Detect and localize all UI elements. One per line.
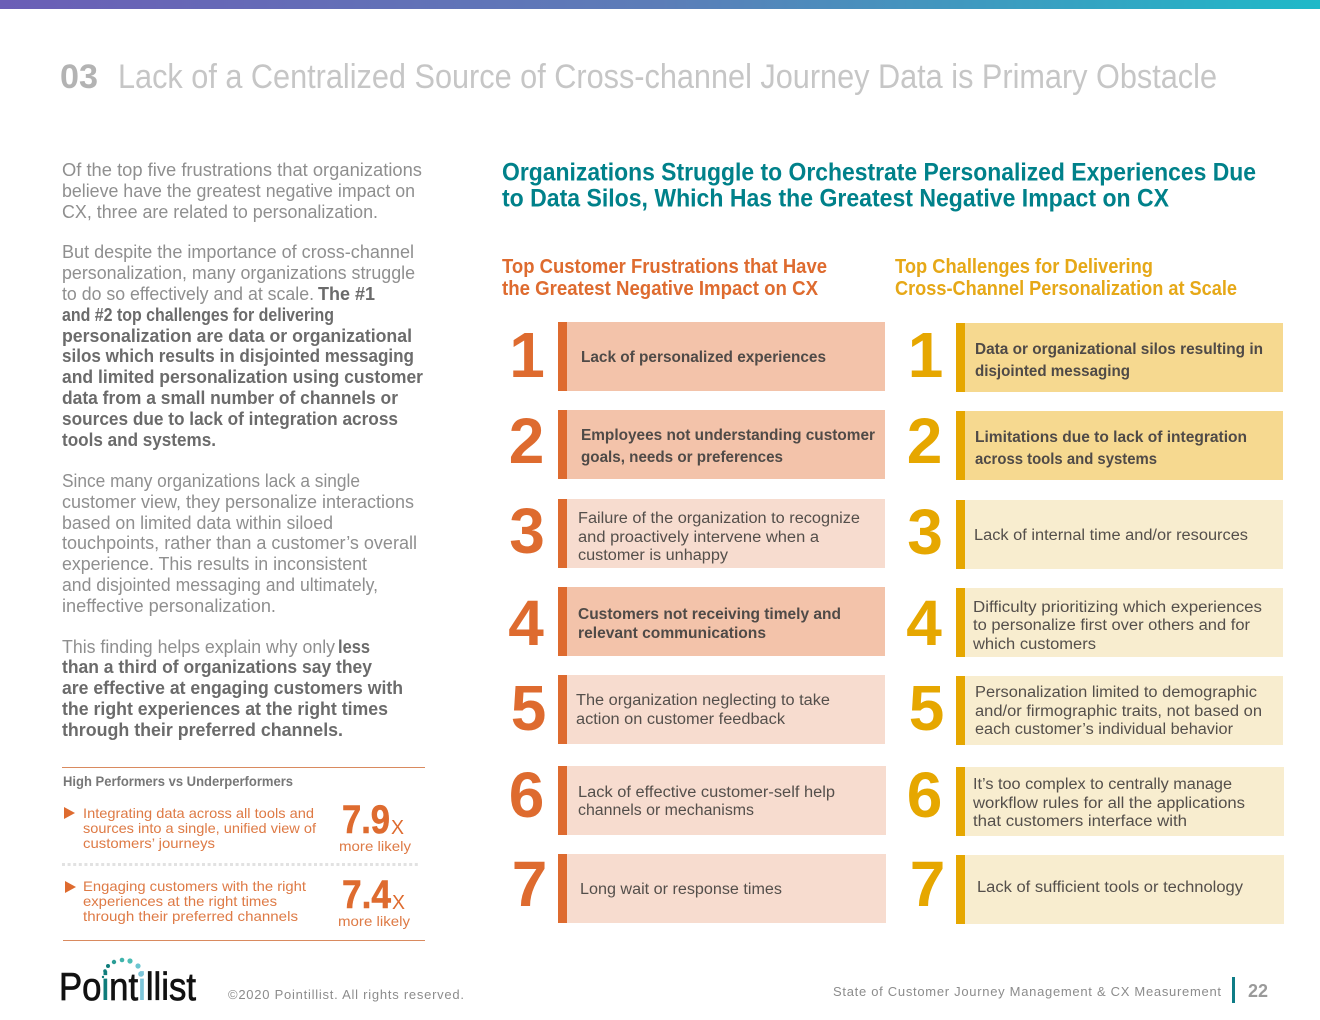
frustration 2: Employees not understanding customer (581, 427, 875, 444)
paragraph 4: less (338, 637, 370, 657)
paragraph 2: and limited personalization using customer (62, 367, 423, 387)
frustration 6 (509, 759, 886, 835)
paragraph 4: than a third of organizations say they (62, 657, 372, 677)
frustration 6: channels or mechanisms (578, 802, 754, 819)
challenge 1: Data or organizational silos resulting in (975, 341, 1263, 358)
paragraph 2: sources due to lack of integration across (62, 409, 398, 429)
logo: Pointillist: Pointillist (59, 966, 196, 1009)
frustration 1: Lack of personalized experiences (581, 349, 826, 366)
frustration 4 (508, 587, 885, 659)
stat row: 7.4x: X (392, 892, 405, 914)
challenge 6 (907, 759, 1284, 836)
stat row: 7.4x: experiences at the right times (83, 893, 277, 909)
paragraph 2: personalization, many organizations struggle (62, 263, 415, 283)
main heading: Organizations Struggle to Orchestrate Personalized Experiences Due (502, 158, 1256, 186)
column heading: challenges: Top Challenges for Delivering (895, 256, 1153, 278)
footer report title: State of Customer Journey Management & CX Measurement (833, 984, 1221, 999)
challenge 5: each customer’s individual behavior (975, 721, 1233, 738)
frustration 2 (509, 405, 885, 479)
challenge 5: and/or firmographic traits, not based on (975, 703, 1262, 720)
frustration 6: 6 (509, 759, 544, 831)
challenge 1: disjointed messaging (975, 363, 1130, 380)
challenge 2: across tools and systems (975, 451, 1157, 468)
frustration 7: 7 (512, 848, 547, 920)
challenge 5: 5 (909, 672, 944, 744)
column heading: challenges (895, 256, 1237, 300)
paragraph 3: and disjointed messaging and ultimately, (62, 575, 378, 595)
challenge 2: 2 (907, 405, 942, 477)
paragraph 1 (62, 160, 422, 222)
footer divider (1232, 977, 1235, 1003)
paragraph 4 (62, 637, 403, 740)
frustration 3: Failure of the organization to recognize (578, 510, 860, 527)
paragraph 3: ineffective personalization. (62, 596, 276, 616)
challenge 7: Lack of sufficient tools or technology (977, 879, 1243, 896)
column heading: frustrations: Top Customer Frustrations that Have (502, 256, 827, 278)
paragraph 4: through their preferred channels. (62, 720, 343, 740)
paragraph 2: The #1 (318, 284, 375, 304)
frustration 7: Long wait or response times (580, 881, 782, 898)
frustration 3 (509, 495, 885, 568)
panel: personalization challenges (895, 256, 1284, 924)
stat row: 7.4x: Engaging customers with the right (83, 878, 306, 894)
title: Lack of a Centralized Source of Cross-channel Journey Data is Primary Obstacle (118, 58, 1217, 96)
panel: high performers vs underperformers (62, 767, 425, 941)
paragraph 3: touchpoints, rather than a customer’s overall (62, 533, 417, 553)
top gradient bar (0, 0, 1320, 9)
frustration 1: 1 (509, 319, 545, 391)
paragraph 3 (62, 471, 417, 616)
frustration 5: action on customer feedback (576, 711, 785, 728)
paragraph 3: customer view, they personalize interactions (62, 492, 414, 512)
frustration 3: 3 (509, 495, 545, 567)
stat row: 7.9x: sources into a single, unified view of (83, 820, 316, 836)
paragraph 4: are effective at engaging customers with (62, 678, 403, 698)
paragraph 1: CX, three are related to personalization. (62, 202, 378, 222)
frustration 4: Customers not receiving timely and (578, 606, 841, 623)
stat row: 7.9x: customers’ journeys (83, 835, 215, 851)
challenge 2 (907, 405, 1283, 480)
paragraph 4: the right experiences at the right times (62, 699, 388, 719)
frustration 3: and proactively intervene when a (578, 529, 819, 546)
challenge 4: Difficulty prioritizing which experiences (973, 599, 1262, 616)
challenge 2: Limitations due to lack of integration (975, 429, 1247, 446)
frustration 3: customer is unhappy (578, 547, 728, 564)
paragraph 3: based on limited data within siloed (62, 513, 333, 533)
stat row: 7.9x: X (391, 817, 404, 839)
challenge 6: It’s too complex to centrally manage (973, 776, 1232, 793)
stat row: 7.9x (64, 798, 411, 854)
paragraph 2 (62, 242, 423, 450)
frustration 5: 5 (511, 672, 546, 744)
paragraph 2: But despite the importance of cross-channel (62, 242, 414, 262)
challenge 1: 1 (908, 319, 943, 391)
column heading: challenges: Cross-Channel Personalization at Scale (895, 278, 1237, 300)
paragraph 4: This finding helps explain why only (62, 637, 335, 657)
column heading: frustrations (502, 256, 827, 300)
frustration 1 (509, 319, 885, 391)
frustration 6: Lack of effective customer-self help (578, 784, 835, 801)
stat row: 7.9x: 7.9 (342, 798, 390, 842)
stat row: 7.4x: 7.4 (342, 873, 392, 917)
paragraph 2: and #2 top challenges for delivering (62, 305, 334, 325)
frustration 4: 4 (508, 587, 544, 659)
stat row: 7.4x: through their preferred channels (83, 908, 298, 924)
paragraph 3: Since many organizations lack a single (62, 471, 360, 491)
paragraph 2: to do so effectively and at scale. (62, 284, 314, 304)
challenge 5: Personalization limited to demographic (975, 684, 1257, 701)
frustration 4: relevant communications (578, 625, 766, 642)
paragraph 3: experience. This results in inconsistent (62, 554, 367, 574)
challenge 3 (907, 496, 1283, 569)
column heading: frustrations: the Greatest Negative Impact on CX (502, 278, 819, 300)
main heading: to Data Silos, Which Has the Greatest Negative Impact on CX (502, 184, 1169, 212)
challenge 4: which customers (972, 636, 1096, 653)
paragraph 2: silos which results in disjointed messaging (62, 346, 414, 366)
paragraph 1: Of the top five frustrations that organizations (62, 160, 422, 180)
challenge 1 (908, 319, 1283, 392)
frustration 5 (511, 672, 885, 744)
frustration 5: The organization neglecting to take (576, 692, 830, 709)
paragraph 2: tools and systems. (62, 430, 216, 450)
paragraph 2: data from a small number of channels or (62, 388, 398, 408)
page number: 22 (1248, 981, 1268, 1001)
frustration 2: goals, needs or preferences (581, 449, 783, 466)
paragraph 2: personalization are data or organizational (62, 326, 412, 346)
challenge 3: Lack of internal time and/or resources (974, 527, 1248, 544)
frustration 2: 2 (509, 405, 544, 477)
stat row: 7.9x: more likely (339, 838, 411, 854)
stat row: 7.4x: more likely (338, 913, 410, 929)
paragraph 1: believe have the greatest negative impact on (62, 181, 415, 201)
challenge 4: to personalize first over others and for (973, 617, 1250, 634)
stat row: 7.9x: Integrating data across all tools and (83, 805, 314, 821)
challenge 3: 3 (907, 496, 943, 568)
challenge 7 (910, 848, 1284, 924)
copyright: ©2020 Pointillist. All rights reserved. (228, 987, 464, 1002)
panel: customer frustrations (502, 256, 886, 923)
challenge 4 (906, 587, 1283, 659)
challenge 4: 4 (906, 587, 942, 659)
frustration 7 (512, 848, 886, 923)
title: 03 (60, 58, 98, 96)
callout heading: High Performers vs Underperformers (63, 774, 293, 789)
challenge 6: workflow rules for all the applications (972, 795, 1245, 812)
stat row: 7.4x (65, 873, 410, 929)
panel: left narrative text (62, 160, 423, 740)
challenge 6: that customers interface with (973, 813, 1187, 830)
challenge 5 (909, 672, 1283, 745)
challenge 6: 6 (907, 759, 942, 831)
main heading (502, 158, 1256, 212)
challenge 7: 7 (910, 848, 945, 920)
